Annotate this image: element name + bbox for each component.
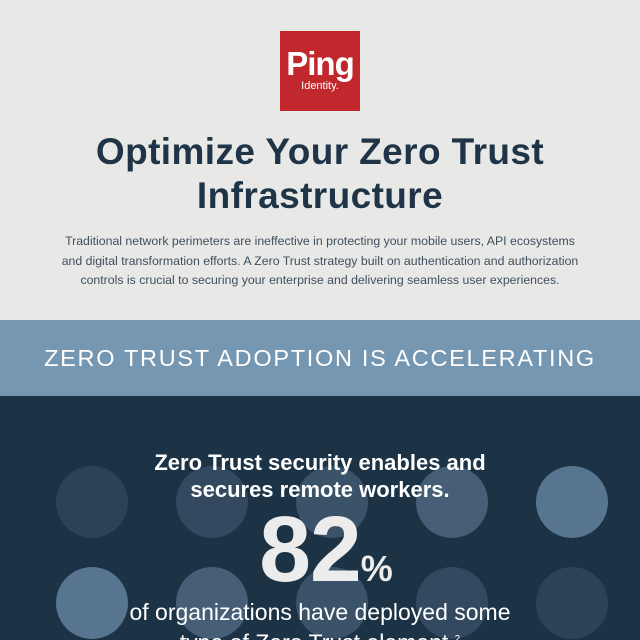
banner: [0, 320, 640, 396]
intro text: [62, 234, 578, 287]
intro text: controls is crucial to securing your enterprise and delivering seamless user experiences.: [80, 273, 560, 287]
stat caption: of organizations have deployed some: [129, 599, 511, 625]
stat caption: [129, 599, 511, 640]
heading: [154, 450, 486, 502]
logo: [280, 31, 360, 111]
stat 82%: 82%: [259, 497, 393, 601]
logo: Ping: [286, 45, 354, 82]
heading: secures remote workers.: [190, 477, 450, 502]
panel: stats: [0, 396, 640, 640]
intro text: Traditional network perimeters are ineffective in protecting your mobile users, API ecosystems: [65, 234, 575, 248]
title: Optimize Your Zero Trust: [96, 131, 544, 172]
logo: Identity.: [301, 80, 339, 92]
title: Infrastructure: [197, 175, 443, 216]
heading: Zero Trust security enables and: [154, 450, 486, 475]
intro text: and digital transformation efforts. A Zero Trust strategy built on authentication and authorization: [62, 254, 578, 268]
title: [96, 131, 544, 216]
banner: ZERO TRUST ADOPTION IS ACCELERATING: [44, 345, 596, 371]
